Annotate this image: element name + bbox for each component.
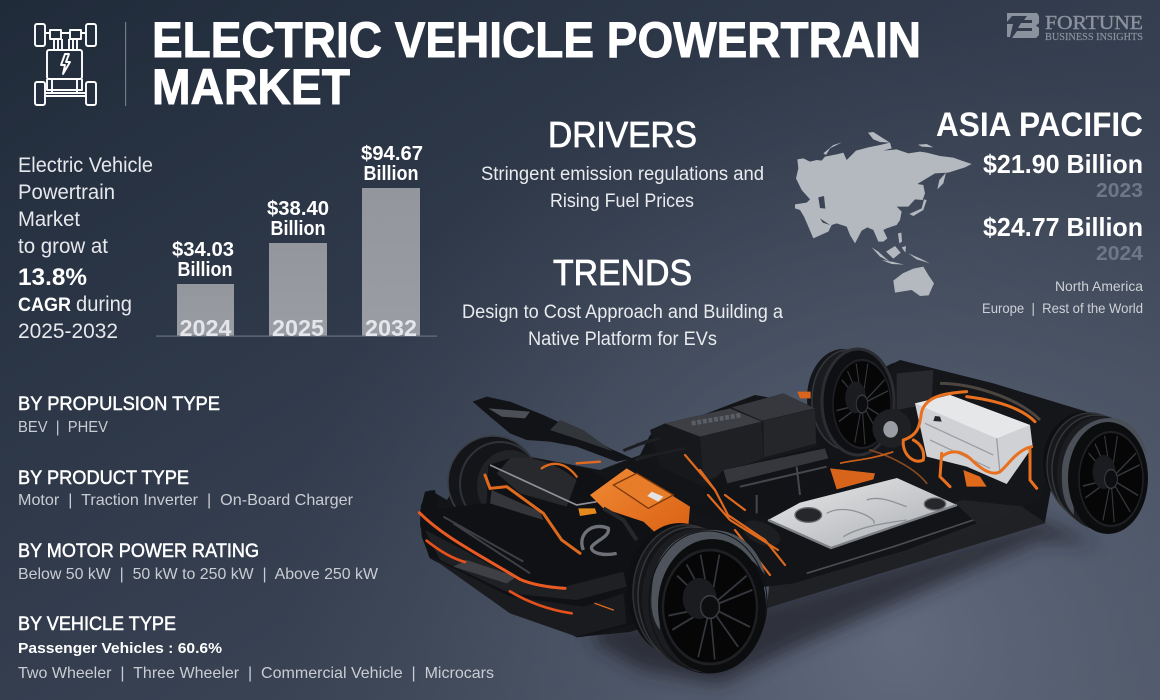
drivers: DRIVERS — [548, 114, 697, 155]
bar chart: $94.67 — [361, 143, 423, 165]
car chassis illustration — [419, 349, 1148, 685]
segment: propulsion type: BY PROPULSION TYPE — [18, 394, 220, 415]
segment: motor power rating: Below 50 kW | 50 kW to 250 kW | Above 250 kW — [18, 566, 379, 583]
inverter block — [687, 445, 893, 523]
bar chart: $34.03 — [172, 239, 234, 261]
bar chart: Billion — [178, 259, 232, 281]
map: Asia Pacific — [795, 132, 972, 296]
trends: Design to Cost Approach and Building a — [462, 302, 783, 323]
segment: propulsion type: BEV | PHEV — [18, 419, 108, 436]
asia pacific stats — [936, 106, 1144, 316]
segment: propulsion type — [18, 394, 220, 436]
asia pacific stats: North America — [1055, 278, 1143, 294]
segment: vehicle type: BY VEHICLE TYPE — [18, 614, 176, 635]
bar chart: 2024 — [180, 315, 232, 341]
bar chart: 2032 — [365, 315, 417, 341]
drivers — [481, 114, 764, 212]
segment: vehicle type — [18, 614, 494, 682]
asia pacific stats: $21.90 Billion — [983, 149, 1143, 179]
segment: motor power rating — [18, 541, 379, 583]
bar chart: Billion — [364, 163, 418, 185]
wheel: rear right — [1043, 412, 1148, 534]
asia pacific stats: $24.77 Billion — [983, 212, 1143, 242]
bar chart: 2025 — [272, 315, 324, 341]
floor pan — [767, 500, 1046, 608]
segment: motor power rating: BY MOTOR POWER RATING — [18, 541, 259, 562]
text: CAGR statement: 2025-2032 — [18, 320, 118, 343]
asia pacific stats: ASIA PACIFIC — [936, 106, 1143, 144]
rear hub and motor — [870, 392, 1037, 488]
logo: Fortune Business Insights: FORTUNE — [1045, 12, 1143, 34]
text: CAGR statement: during — [76, 293, 132, 316]
wiring harness — [685, 455, 785, 575]
text: CAGR statement — [18, 154, 153, 343]
text: CAGR statement: Electric Vehicle — [18, 154, 153, 177]
car underbody silhouette — [420, 363, 1060, 637]
title: MARKET — [152, 59, 350, 115]
segment: vehicle type: Passenger Vehicles : 60.6% — [18, 640, 222, 657]
divider — [125, 22, 126, 106]
title — [152, 12, 921, 115]
logo: Fortune Business Insights: BUSINESS INSIGHTS — [1045, 32, 1143, 43]
trends: Native Platform for EVs — [528, 329, 717, 350]
text: CAGR statement: to grow at — [18, 235, 108, 258]
trends: TRENDS — [553, 252, 692, 293]
text: CAGR statement: Powertrain — [18, 181, 115, 204]
bar chart — [156, 143, 437, 341]
drivers: Rising Fuel Prices — [550, 191, 694, 212]
wheel: front right — [627, 523, 767, 673]
front bay — [419, 397, 650, 637]
trends — [462, 252, 783, 350]
segment: product type: BY PRODUCT TYPE — [18, 468, 189, 489]
wheel: rear left — [807, 349, 894, 455]
rear frame — [840, 360, 1087, 567]
bar chart: Billion — [270, 218, 326, 240]
text: CAGR statement: Market — [18, 208, 80, 231]
logo: Fortune Business Insights — [1007, 12, 1143, 43]
battery boxes — [637, 392, 817, 487]
battery plate — [739, 478, 977, 587]
title: ELECTRIC VEHICLE POWERTRAIN — [152, 12, 921, 68]
segment: product type: Motor | Traction Inverter | On-Board Charger — [18, 492, 354, 509]
asia pacific stats: 2023 — [1096, 180, 1143, 202]
asia pacific stats: 2024 — [1096, 243, 1144, 265]
text: CAGR statement: 13.8% — [18, 264, 87, 291]
text: CAGR statement: CAGR — [18, 295, 71, 316]
icon: EV chassis — [35, 24, 96, 105]
wheel: front left — [448, 436, 543, 528]
bar chart: $38.40 — [267, 198, 329, 220]
segment: product type — [18, 468, 354, 509]
orange inverter box — [590, 468, 690, 540]
drivers: Stringent emission regulations and — [481, 164, 764, 185]
asia pacific stats: Europe | Rest of the World — [982, 300, 1143, 316]
segment: vehicle type: Two Wheeler | Three Wheeler | Commercial Vehicle | Microcars — [18, 665, 494, 682]
